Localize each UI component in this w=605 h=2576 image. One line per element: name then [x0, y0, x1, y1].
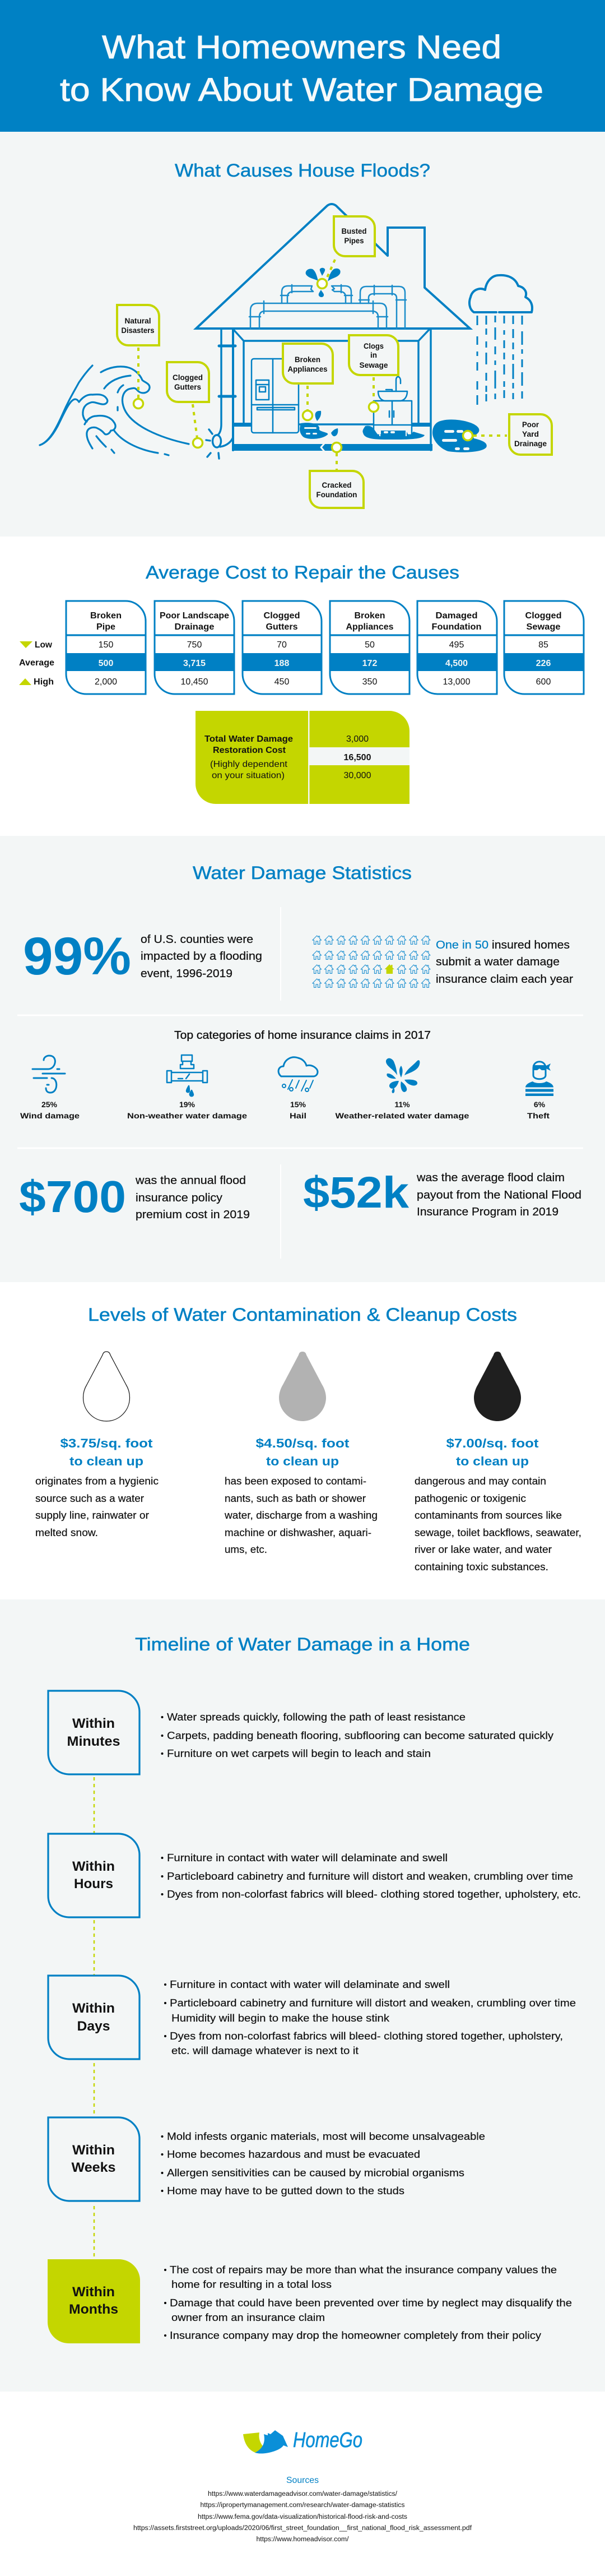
- heading: statistics: Water Damage Statistics: [193, 863, 412, 883]
- callout: cracked foundation: Cracked: [322, 481, 352, 489]
- sources list: https://www.homeadvisor.com/: [257, 2536, 349, 2543]
- timeline step: within hours: Dyes from non-colorfast fabrics will bleed- clothing stored together, upholstery, etc.: [167, 1889, 581, 1900]
- claim: weather-related water damage: 11%: [394, 1100, 410, 1109]
- logo: HomeGo: HomeGo: [293, 2429, 362, 2452]
- timeline step: within months: The cost of repairs may be more than what the insurance company values the: [170, 2264, 557, 2276]
- claim: weather-related water damage: [335, 1058, 469, 1120]
- title: [60, 29, 543, 108]
- timeline step: within weeks: Home may have to be gutted down to the studs: [167, 2185, 404, 2196]
- column: black water: contaminants from sources like: [415, 1510, 562, 1521]
- total restoration cost box: Restoration Cost: [213, 746, 286, 755]
- icon grid: one in fifty homes: [313, 936, 430, 987]
- column: gray water: nants, such as bath or shower: [225, 1493, 366, 1504]
- claim: wind damage: 25%: [41, 1100, 58, 1109]
- cost card: clogged sewage: Clogged: [525, 611, 561, 621]
- column: clean water: originates from a hygienic: [35, 1476, 159, 1487]
- timeline step: within months: Months: [69, 2302, 118, 2317]
- column: gray water: $4.50/sq. foot: [255, 1436, 350, 1450]
- stat: 99 percent: event, 1996-2019: [141, 968, 232, 980]
- legend: low average high: Low: [35, 640, 53, 650]
- stat: 99 percent: impacted by a flooding: [141, 950, 262, 963]
- timeline step: within hours: Particleboard cabinetry and furniture will distort and weaken, crumbling over time: [167, 1871, 573, 1882]
- cost card: broken appliances: 172: [362, 659, 377, 668]
- cost card: broken appliances: [329, 601, 410, 694]
- claim: theft: 6%: [534, 1100, 546, 1109]
- subheading: top categories: Top categories of home insurance claims in 2017: [174, 1029, 431, 1042]
- callout: busted pipes: [317, 216, 375, 288]
- callout: broken appliances: Broken: [295, 355, 320, 364]
- sources list: https://www.waterdamageadvisor.com/water-damage/statistics/: [208, 2491, 398, 2498]
- panel: water damage statistics: [0, 836, 605, 1282]
- cost card: clogged gutters: 188: [274, 659, 289, 668]
- column: clean water: to clean up: [69, 1454, 143, 1468]
- timeline step: within months: Within: [72, 2284, 115, 2300]
- timeline step: within months: Damage that could have been prevented over time by neglect may disqualify the: [170, 2297, 572, 2309]
- timeline step: within days: Particleboard cabinetry and furniture will distort and weaken, crumbling over time: [170, 1997, 576, 2009]
- timeline step: within days: Humidity will begin to make the house stink: [171, 2013, 390, 2024]
- cost card: poor landscape drainage: Drainage: [175, 622, 215, 632]
- total restoration cost box: (Highly dependent: [210, 760, 288, 769]
- claim: non-weather water damage: [127, 1055, 247, 1120]
- cost card: clogged sewage: [503, 601, 585, 694]
- legend: low average high: Average: [19, 658, 54, 668]
- icon: leaking pipe: [167, 1055, 207, 1096]
- cost card: clogged sewage: 226: [536, 659, 551, 668]
- sources list: Sources: [286, 2476, 319, 2485]
- total restoration cost box: 30,000: [344, 771, 371, 780]
- illustration: sink cabinet: [374, 377, 412, 435]
- timeline step: within weeks: Allergen sensitivities can be caused by microbial organisms: [167, 2167, 464, 2179]
- cost card: clogged gutters: [242, 601, 323, 694]
- panel: average cost to repair: [19, 562, 585, 804]
- timeline step: within days: Furniture in contact with water will delaminate and swell: [170, 1979, 450, 1990]
- stat: 52k dollars: payout from the National Flood: [417, 1189, 581, 1201]
- heading: timeline: Timeline of Water Damage in a Home: [135, 1634, 470, 1654]
- claim: hail: [278, 1057, 318, 1120]
- timeline step: within minutes: [48, 1691, 553, 1774]
- illustration: puddles: [300, 411, 487, 452]
- callout: natural disasters: [117, 305, 159, 408]
- timeline step: within hours: Hours: [74, 1876, 113, 1891]
- column: gray water: machine or dishwasher, aquari-: [225, 1527, 371, 1538]
- cost card: broken pipe: Broken: [90, 611, 122, 621]
- callout: clogs in sewage: in: [370, 351, 377, 359]
- stat: one in 50: One in 50: [436, 939, 488, 951]
- stat: 700 dollars: insurance policy: [136, 1192, 222, 1204]
- total restoration cost box: Total Water Damage: [204, 734, 293, 744]
- timeline step: within minutes: Within: [72, 1716, 115, 1731]
- claim: non-weather water damage: 19%: [179, 1100, 196, 1109]
- heading: contamination: Levels of Water Contamination & Cleanup Costs: [88, 1305, 517, 1325]
- timeline step: within hours: Furniture in contact with water will delaminate and swell: [167, 1852, 448, 1863]
- heading: what causes house floods: What Causes House Floods?: [175, 160, 430, 181]
- icon: white drop: [83, 1352, 130, 1421]
- timeline step: within weeks: Mold infests organic materials, most will become unsalvageable: [167, 2131, 485, 2142]
- callout: busted pipes: Busted: [342, 227, 366, 235]
- callout: clogged gutters: Clogged: [173, 373, 203, 382]
- callout: clogged gutters: Gutters: [174, 383, 201, 391]
- timeline step: within months: Insurance company may drop the homeowner completely from their policy: [170, 2330, 541, 2341]
- timeline step: within days: Dyes from non-colorfast fabrics will bleed- clothing stored together, upholstery,: [170, 2031, 563, 2042]
- cost card: clogged gutters: 70: [277, 640, 287, 650]
- callout: broken appliances: Appliances: [288, 365, 327, 373]
- illustration: pipes in attic: [249, 285, 406, 329]
- claim: theft: [525, 1062, 553, 1120]
- icon: black drop: [474, 1352, 521, 1421]
- stat: 99 percent: of U.S. counties were: [141, 933, 253, 946]
- callout: cracked foundation: Foundation: [316, 491, 357, 499]
- stat: 700 dollars: [19, 1172, 250, 1222]
- illustration: pipe burst drops: [306, 268, 341, 297]
- timeline step: within weeks: Home becomes hazardous and must be evacuated: [167, 2149, 420, 2160]
- callout: broken appliances: [283, 344, 333, 420]
- title: What Homeowners Need: [102, 29, 501, 66]
- panel: what causes house floods: [0, 132, 605, 537]
- claim: non-weather water damage: Non-weather water damage: [127, 1111, 247, 1120]
- cost card: damaged foundation: [417, 601, 497, 694]
- cost card: broken appliances: Broken: [354, 611, 385, 621]
- cost card: poor landscape drainage: 3,715: [183, 659, 206, 668]
- legend: low average high: High: [34, 677, 54, 687]
- column: black water: sewage, toilet backflows, seawater,: [415, 1527, 581, 1538]
- stat: 52k dollars: $52k: [303, 1167, 409, 1217]
- heading: average cost: Average Cost to Repair the Causes: [146, 562, 459, 582]
- column: clean water: source such as a water: [35, 1493, 144, 1504]
- cost card: broken pipe: 500: [99, 659, 113, 668]
- claim: hail: 15%: [290, 1100, 306, 1109]
- timeline step: within days: etc. will damage whatever is next to it: [171, 2045, 359, 2056]
- legend: low average high: [19, 640, 54, 687]
- cost card: damaged foundation: Foundation: [431, 622, 482, 632]
- column: clean water: $3.75/sq. foot: [61, 1436, 153, 1450]
- stat: 99 percent: 99%: [23, 927, 131, 986]
- column: gray water: to clean up: [266, 1454, 339, 1468]
- cost card: broken appliances: 50: [365, 640, 375, 650]
- column: clean water: supply line, rainwater or: [35, 1510, 149, 1521]
- column: black water: [415, 1352, 581, 1573]
- icon: wind: [32, 1056, 65, 1093]
- stat: one in 50: [436, 939, 573, 986]
- cost card: clogged sewage: Sewage: [527, 622, 561, 632]
- column: gray water: [224, 1352, 378, 1555]
- illustration: cloud and rain: [469, 275, 532, 405]
- illustration: house structure: [196, 204, 470, 459]
- cost card: clogged sewage: 85: [538, 640, 548, 650]
- column: gray water: water, discharge from a washing: [224, 1510, 378, 1521]
- column: clean water: [35, 1352, 159, 1538]
- callout: clogs in sewage: [349, 335, 398, 411]
- column: black water: to clean up: [456, 1454, 529, 1468]
- cost card: broken appliances: Appliances: [346, 622, 394, 632]
- title: to Know About Water Damage: [60, 72, 543, 108]
- timeline step: within hours: [48, 1834, 581, 1917]
- callout: cracked foundation: [310, 443, 364, 508]
- stat: 700 dollars: premium cost in 2019: [136, 1209, 250, 1221]
- total restoration cost box: [196, 711, 409, 804]
- timeline step: within minutes: Water spreads quickly, following the path of least resistance: [167, 1712, 466, 1723]
- total restoration cost box: 16,500: [344, 753, 371, 762]
- claim: hail: Hail: [290, 1111, 306, 1120]
- callout: clogged gutters: [167, 362, 209, 447]
- callout: clogs in sewage: Clogs: [364, 342, 384, 350]
- cost card: damaged foundation: 495: [449, 640, 464, 650]
- cost card: poor landscape drainage: [153, 601, 235, 694]
- illustration: wave: [40, 366, 189, 455]
- column: black water: $7.00/sq. foot: [446, 1436, 539, 1450]
- callout: natural disasters: Natural: [124, 317, 151, 325]
- callout: poor yard drainage: Yard: [522, 430, 539, 438]
- stat: one in 50: insurance claim each year: [436, 973, 573, 986]
- cost card: damaged foundation: 4,500: [445, 659, 468, 668]
- total restoration cost box: on your situation): [212, 771, 285, 780]
- timeline step: within weeks: Within: [72, 2143, 115, 2158]
- cost card: damaged foundation: 13,000: [443, 677, 471, 687]
- callout: poor yard drainage: Drainage: [514, 440, 547, 448]
- header banner: [0, 0, 605, 132]
- timeline step: within days: Within: [72, 2001, 115, 2016]
- sources list: https://www.fema.gov/data-visualization/historical-flood-risk-and-costs: [198, 2514, 407, 2520]
- timeline step: within minutes: Carpets, padding beneath flooring, subflooring can become saturated quickly: [167, 1730, 553, 1741]
- cost card: poor landscape drainage: 10,450: [181, 677, 208, 687]
- icon: hail cloud: [278, 1057, 318, 1092]
- icon: splash: [386, 1058, 420, 1093]
- timeline step: within hours: Within: [72, 1859, 115, 1874]
- icon: thief: [525, 1062, 553, 1096]
- footer: [133, 2429, 472, 2543]
- logo: HomeGo: [243, 2429, 362, 2454]
- timeline step: within months: [48, 2259, 572, 2343]
- cost card: poor landscape drainage: 750: [187, 640, 202, 650]
- stat: 700 dollars: $700: [19, 1172, 126, 1222]
- timeline step: within months: owner from an insurance claim: [171, 2312, 325, 2323]
- cost card: broken appliances: 350: [362, 677, 377, 687]
- icon: gray drop: [279, 1352, 326, 1421]
- callout: busted pipes: Pipes: [344, 237, 364, 245]
- timeline step: within days: [48, 1976, 576, 2059]
- callout: clogs in sewage: Sewage: [360, 361, 388, 369]
- callout: poor yard drainage: Poor: [522, 420, 539, 429]
- column: black water: pathogenic or toxigenic: [415, 1493, 526, 1504]
- cost card: clogged gutters: Gutters: [266, 622, 298, 632]
- sources list: [133, 2476, 472, 2543]
- stat: 52k dollars: Insurance Program in 2019: [417, 1206, 559, 1218]
- cost card: broken pipe: [65, 601, 147, 694]
- column: gray water: has been exposed to contami-: [225, 1476, 366, 1487]
- claim: weather-related water damage: Weather-related water damage: [335, 1111, 469, 1120]
- claim: theft: Theft: [527, 1111, 550, 1120]
- column: black water: containing toxic substances.: [415, 1561, 548, 1573]
- timeline step: within months: home for resulting in a total loss: [171, 2279, 332, 2290]
- cost card: clogged gutters: 450: [274, 677, 289, 687]
- stat: 700 dollars: was the annual flood: [135, 1174, 246, 1187]
- panel: timeline: [0, 1599, 605, 2392]
- timeline step: within minutes: Minutes: [67, 1734, 120, 1749]
- stat: 52k dollars: [303, 1167, 581, 1218]
- timeline step: within weeks: Weeks: [72, 2160, 115, 2175]
- stat: one in 50: submit a water damage: [436, 956, 560, 968]
- stat: 52k dollars: was the average flood claim: [416, 1172, 565, 1184]
- cost card: clogged sewage: 600: [536, 677, 551, 687]
- timeline step: within weeks: [48, 2117, 485, 2201]
- cost card: broken pipe: Pipe: [96, 622, 115, 632]
- timeline step: within days: Days: [77, 2019, 110, 2034]
- panel: levels of contamination: [35, 1305, 581, 1573]
- illustration: refrigerator: [252, 359, 299, 433]
- claim: wind damage: [20, 1056, 80, 1120]
- total restoration cost box: 3,000: [346, 734, 369, 744]
- sources list: https://ipropertymanagement.com/research/water-damage-statistics: [201, 2502, 405, 2509]
- column: gray water: ums, etc.: [225, 1544, 267, 1555]
- callout: poor yard drainage: [463, 414, 552, 455]
- cost card: poor landscape drainage: Poor Landscape: [160, 611, 229, 621]
- cost card: clogged gutters: Clogged: [263, 611, 300, 621]
- callout: natural disasters: Disasters: [121, 326, 155, 335]
- cost card: damaged foundation: Damaged: [436, 611, 477, 621]
- column: clean water: melted snow.: [35, 1527, 98, 1538]
- sources list: https://assets.firststreet.org/uploads/2020/06/first_street_foundation__first_national_flood_risk_assessment.pdf: [133, 2525, 472, 2532]
- cost card: broken pipe: 2,000: [95, 677, 117, 687]
- stat: one in 50: insured homes: [492, 939, 570, 951]
- cost card: broken pipe: 150: [99, 640, 113, 650]
- column: black water: dangerous and may contain: [415, 1476, 546, 1487]
- column: black water: river or lake water, and water: [415, 1544, 552, 1555]
- timeline step: within minutes: Furniture on wet carpets will begin to leach and stain: [167, 1748, 431, 1759]
- stat: 99 percent: [23, 927, 262, 986]
- claim: wind damage: Wind damage: [20, 1111, 80, 1120]
